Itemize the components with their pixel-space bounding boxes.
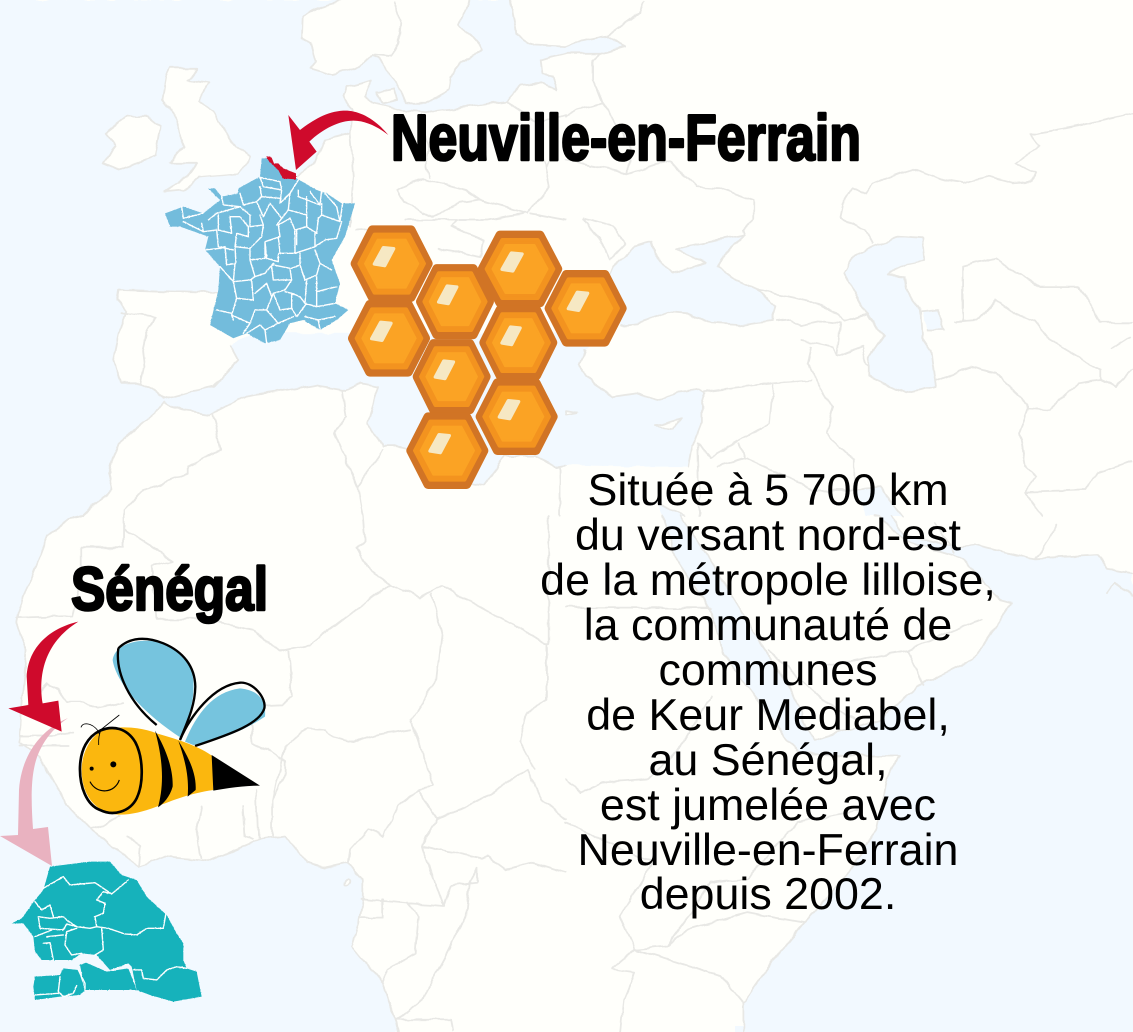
bee illustration xyxy=(80,639,265,815)
text block: twinning description: la communauté de xyxy=(584,600,952,650)
map quadrant: west Africa xyxy=(0,516,566,1032)
bee tail xyxy=(212,755,260,791)
arrow: to Neuville-en-Ferrain xyxy=(288,111,388,170)
text block: twinning description: est jumelée avec xyxy=(600,780,936,830)
text block: twinning description: communes xyxy=(658,645,878,695)
bee face xyxy=(81,715,119,791)
department borders xyxy=(182,177,343,343)
Senegal fill xyxy=(12,862,202,1002)
heading: Neuville-en-Ferrain: Neuville-en-Ferrain xyxy=(391,101,861,174)
region borders xyxy=(35,877,187,997)
arrow: pink, to Senegal map xyxy=(0,718,68,866)
map of Senegal xyxy=(12,862,202,1002)
heading: Sénégal: Sénégal xyxy=(71,555,268,623)
text block: twinning description: de Keur Mediabel, xyxy=(586,690,950,740)
bee stripes xyxy=(155,731,173,807)
text block: twinning description: depuis 2002. xyxy=(640,869,896,919)
map quadrant: eastern Europe and central Asia xyxy=(566,2,1132,516)
France fill xyxy=(165,158,355,343)
text block: twinning description: Située à 5 700 km xyxy=(587,465,949,515)
bee head outline xyxy=(80,728,142,813)
text block: twinning description: au Sénégal, xyxy=(648,735,888,785)
arrow: red, to Senegal xyxy=(8,622,78,732)
text block: twinning description: du versant nord-est xyxy=(575,510,962,560)
bee wings xyxy=(113,639,265,746)
text block: twinning description xyxy=(540,465,996,919)
map of France xyxy=(165,156,355,343)
bee body xyxy=(82,727,213,815)
map quadrant: east Africa and Arabian sea xyxy=(566,516,1132,1032)
Nord department highlighted xyxy=(267,156,296,179)
text block: twinning description: Neuville-en-Ferrain xyxy=(578,825,958,875)
map quadrant: north-west Europe and Mediterranean xyxy=(0,0,566,516)
text block: twinning description: de la métropole lilloise, xyxy=(540,555,996,605)
honeycomb illustration xyxy=(353,230,622,484)
